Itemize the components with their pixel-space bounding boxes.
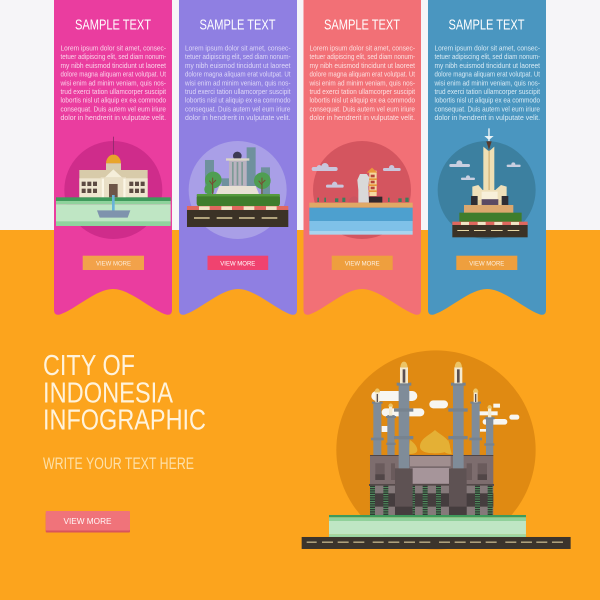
text block purple: dolor in hendrerit in vulputate velit. bbox=[185, 113, 290, 122]
road bbox=[302, 537, 571, 549]
text block coral: wisi enim ad minim veniam, quis nos- bbox=[309, 78, 415, 87]
text block coral: dolor in hendrerit in vulputate velit. bbox=[310, 113, 415, 122]
panel: coral ribbon bbox=[304, 0, 421, 315]
text block blue: dolor in hendrerit in vulputate velit. bbox=[434, 113, 540, 122]
button coral bbox=[332, 256, 393, 270]
text block purple: my nibh euismod tincidunt ut laoreet bbox=[185, 61, 290, 70]
text block purple: Lorem ipsum dolor sit amet, consec- bbox=[185, 44, 291, 52]
text block pink: consequat. Duis autem vel eum iriure bbox=[60, 104, 166, 113]
text block pink bbox=[60, 44, 166, 122]
text block coral bbox=[309, 44, 415, 122]
text block purple: consequat. Duis autem vel eum iriure bbox=[185, 104, 290, 113]
button pink: VIEW MORE bbox=[96, 260, 132, 268]
button purple: VIEW MORE bbox=[220, 260, 256, 268]
text block purple: trud exerci tation ullamcorper suscipit bbox=[185, 87, 290, 96]
icon: grand mosque illustration bbox=[302, 350, 571, 550]
text block purple bbox=[184, 44, 291, 122]
text block blue: trud exerci tation ullamcorper suscipit bbox=[434, 87, 540, 96]
button: view more main bbox=[46, 511, 130, 532]
ribbon shape coral bbox=[304, 0, 421, 315]
panel: blue ribbon bbox=[428, 0, 546, 315]
title: INDONESIA bbox=[43, 378, 174, 410]
text block pink: wisi enim ad minim veniam, quis nos- bbox=[60, 78, 166, 87]
text block pink: trud exerci tation ullamcorper suscipit bbox=[60, 87, 166, 96]
mosque body bbox=[369, 455, 494, 515]
heading blue: SAMPLE TEXT bbox=[448, 16, 524, 34]
clouds bbox=[371, 391, 519, 432]
text block pink: Lorem ipsum dolor sit amet, consec- bbox=[60, 44, 166, 52]
panel: pink ribbon bbox=[54, 0, 172, 315]
icon: monument with trees and road bbox=[187, 141, 288, 239]
ground bbox=[329, 515, 526, 537]
button blue bbox=[456, 256, 517, 270]
ribbon shape pink bbox=[54, 0, 172, 315]
ribbon shape blue bbox=[428, 0, 546, 315]
button coral: VIEW MORE bbox=[345, 260, 380, 268]
text block coral: trud exerci tation ullamcorper suscipit bbox=[310, 87, 415, 96]
text block blue: wisi enim ad minim veniam, quis nos- bbox=[434, 78, 540, 87]
text block purple: wisi enim ad minim veniam, quis nos- bbox=[184, 78, 291, 87]
heading purple: SAMPLE TEXT bbox=[200, 16, 276, 34]
title bbox=[43, 350, 206, 436]
text block pink: my nibh euismod tincidunt ut laoreet bbox=[60, 61, 166, 70]
text block pink: dolore magna aliquam erat volutpat. Ut bbox=[60, 70, 166, 79]
heading coral: SAMPLE TEXT bbox=[324, 16, 400, 34]
ribbon shape purple bbox=[179, 0, 297, 315]
domes bbox=[408, 430, 452, 454]
icon: merlion waterfront bbox=[309, 141, 413, 239]
text block blue: tetuer adipiscing elit, sed diam nonum- bbox=[434, 52, 540, 61]
subtitle: WRITE YOUR TEXT HERE bbox=[43, 455, 194, 473]
panel: purple ribbon bbox=[179, 0, 297, 315]
heading pink: SAMPLE TEXT bbox=[75, 16, 151, 34]
text block blue: dolore magna aliquam erat volutpat. Ut bbox=[434, 70, 540, 79]
text block purple: tetuer adipiscing elit, sed diam nonum- bbox=[185, 52, 291, 61]
text block pink: dolor in hendrerit in vulputate velit. bbox=[60, 113, 166, 122]
text block blue: consequat. Duis autem vel eum iriure bbox=[434, 104, 540, 113]
text block blue bbox=[434, 44, 540, 122]
text block coral: tetuer adipiscing elit, sed diam nonum- bbox=[310, 52, 415, 61]
title: CITY OF bbox=[43, 350, 135, 382]
text block purple: dolore magna aliquam erat volutpat. Ut bbox=[185, 70, 290, 79]
text block blue: lobortis nisl ut aliquip ex ea commodo bbox=[434, 96, 540, 105]
text block coral: lobortis nisl ut aliquip ex ea commodo bbox=[310, 96, 415, 105]
text block purple: lobortis nisl ut aliquip ex ea commodo bbox=[185, 96, 290, 105]
text block coral: dolore magna aliquam erat volutpat. Ut bbox=[310, 70, 415, 79]
text block coral: consequat. Duis autem vel eum iriure bbox=[310, 104, 415, 113]
button pink bbox=[83, 256, 144, 270]
icon: tower monument bbox=[438, 128, 536, 239]
button: view more main: VIEW MORE bbox=[64, 516, 112, 526]
text block blue: Lorem ipsum dolor sit amet, consec- bbox=[434, 44, 540, 52]
text block blue: my nibh euismod tincidunt ut laoreet bbox=[434, 61, 540, 70]
text block coral: my nibh euismod tincidunt ut laoreet bbox=[310, 61, 415, 70]
title: INFOGRAPHIC bbox=[43, 404, 206, 436]
text block pink: lobortis nisl ut aliquip ex ea commodo bbox=[60, 96, 166, 105]
text block coral: Lorem ipsum dolor sit amet, consec- bbox=[310, 44, 415, 52]
icon: government building with fountain bbox=[56, 137, 171, 239]
button purple bbox=[208, 256, 268, 270]
text block pink: tetuer adipiscing elit, sed diam nonum- bbox=[60, 52, 166, 61]
button blue: VIEW MORE bbox=[469, 260, 505, 268]
minarets bbox=[371, 362, 495, 468]
